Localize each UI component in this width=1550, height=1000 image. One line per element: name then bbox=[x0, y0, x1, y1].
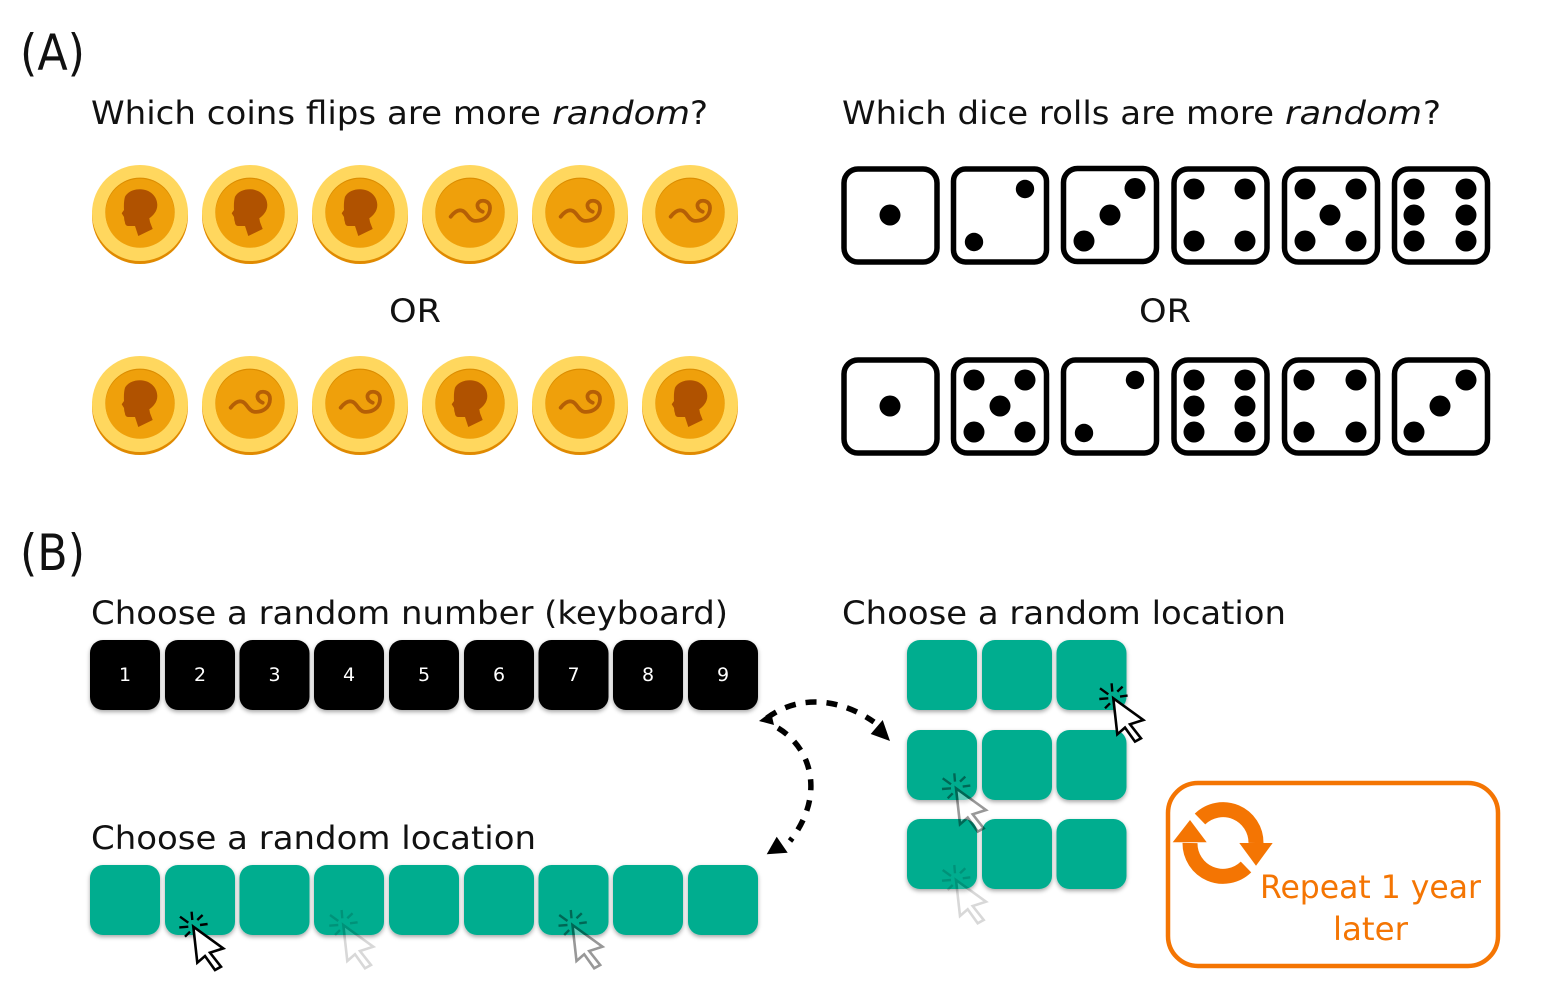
key 5: 5 bbox=[418, 664, 430, 686]
heading: coin flips question bbox=[91, 94, 708, 132]
key 3 bbox=[240, 640, 310, 710]
key 1: 1 bbox=[119, 664, 131, 686]
key 4 bbox=[314, 640, 384, 710]
heading: random location grid: Choose a random location bbox=[842, 594, 1286, 632]
cursor: row click, faint bbox=[329, 910, 373, 968]
heading: dice rolls question bbox=[842, 94, 1441, 132]
key 8: 8 bbox=[642, 664, 654, 686]
heading: random location row: Choose a random location bbox=[91, 819, 536, 857]
coin: heads bbox=[312, 165, 408, 264]
heading: coin flips question: Which coins flips are more bbox=[91, 94, 541, 132]
die: one bbox=[844, 169, 937, 262]
key 6 bbox=[464, 640, 534, 710]
key 2 bbox=[165, 640, 235, 710]
arrow: keyboard to grid bbox=[759, 702, 890, 741]
callout text: later bbox=[1333, 910, 1409, 948]
die: five bbox=[1284, 169, 1378, 262]
cursor: grid click, solid bbox=[1099, 683, 1143, 742]
key 3: 3 bbox=[268, 664, 281, 686]
die: three bbox=[1394, 360, 1488, 453]
heading: random number keyboard: Choose a random number (keyboard) bbox=[91, 594, 728, 632]
heading: dice rolls question: Which dice rolls are more bbox=[842, 94, 1274, 132]
die: two bbox=[954, 169, 1046, 262]
coin: tails bbox=[532, 165, 628, 264]
key 7 bbox=[538, 640, 608, 710]
die: two bbox=[1064, 360, 1156, 453]
dice row: mixed rolls bbox=[844, 360, 1488, 453]
coin row: mixed flips bbox=[92, 356, 738, 455]
coin: tails bbox=[202, 356, 298, 455]
arrow: keyboard to row bbox=[767, 728, 811, 854]
keyboard number keys bbox=[90, 640, 758, 710]
OR label: coins: OR bbox=[389, 292, 441, 330]
heading: dice rolls question: ? bbox=[1423, 94, 1441, 132]
coin: heads bbox=[92, 165, 188, 264]
panel label: B: (B) bbox=[20, 524, 85, 582]
coin: tails bbox=[642, 165, 738, 264]
cursor: grid click, medium bbox=[942, 773, 986, 832]
coin: heads bbox=[202, 165, 298, 264]
coin: tails bbox=[312, 356, 408, 455]
die: four bbox=[1284, 360, 1378, 453]
coin: heads bbox=[422, 356, 518, 455]
key 4: 4 bbox=[343, 664, 355, 686]
green location grid bbox=[907, 640, 1126, 889]
key 2: 2 bbox=[194, 664, 206, 686]
die: five bbox=[954, 360, 1046, 453]
die: six bbox=[1394, 169, 1488, 262]
cursor: grid click, faint bbox=[942, 865, 986, 923]
panel label: A: (A) bbox=[20, 24, 85, 82]
OR label: dice: OR bbox=[1139, 292, 1191, 330]
coin: heads bbox=[642, 356, 738, 455]
coin: tails bbox=[532, 356, 628, 455]
callout: repeat one year later bbox=[1168, 783, 1498, 966]
heading: dice rolls question: random bbox=[1285, 94, 1422, 132]
dice row: ordered rolls bbox=[844, 168, 1488, 262]
coin: tails bbox=[422, 165, 518, 264]
callout text: Repeat 1 year bbox=[1260, 868, 1482, 906]
key 7: 7 bbox=[567, 664, 580, 686]
die: six bbox=[1174, 360, 1267, 453]
key 8 bbox=[613, 640, 683, 710]
key 5 bbox=[389, 640, 459, 710]
key 9 bbox=[688, 640, 758, 710]
key 1 bbox=[90, 640, 160, 710]
key 9: 9 bbox=[717, 664, 729, 686]
callout text bbox=[1260, 868, 1482, 948]
green location row bbox=[90, 865, 758, 935]
heading: coin flips question: random bbox=[552, 94, 690, 132]
cursor: row click, solid bbox=[179, 912, 223, 970]
cursor: row click, medium bbox=[558, 910, 602, 968]
coin: heads bbox=[92, 356, 188, 455]
die: four bbox=[1174, 169, 1267, 262]
die: three bbox=[1064, 168, 1156, 262]
die: one bbox=[844, 360, 937, 453]
key 6: 6 bbox=[493, 664, 505, 686]
coin row: patterned flips bbox=[92, 165, 738, 264]
heading: coin flips question: ? bbox=[690, 94, 708, 132]
icon: repeat cycle arrows bbox=[1173, 810, 1273, 876]
